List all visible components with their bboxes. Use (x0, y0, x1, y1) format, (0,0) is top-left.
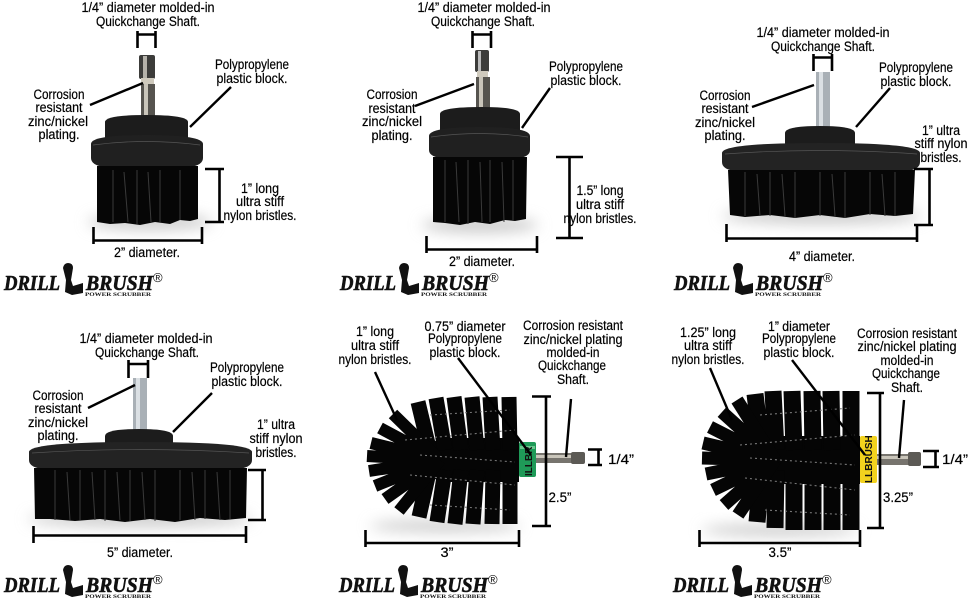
labels: 3” (440, 545, 454, 560)
pointer: polypropylene (856, 88, 890, 127)
labels: Quickchange Shaft. (431, 14, 535, 29)
labels: 1” ultra (922, 123, 960, 138)
labels: Corrosion (34, 87, 84, 102)
labels: 5” diameter. (107, 545, 173, 560)
labels: bristles. (920, 150, 962, 165)
labels: 2” diameter. (114, 245, 180, 260)
logo (3, 565, 163, 600)
labels: Polypropylene (879, 60, 953, 75)
dimension: length (700, 530, 860, 547)
dimension: bristle length (248, 470, 266, 520)
labels: plastic block. (430, 345, 500, 360)
labels: Polypropylene (549, 59, 623, 74)
labels: zinc/nickel (28, 415, 88, 430)
labels: plating. (38, 428, 78, 443)
pointer: corrosion (88, 385, 135, 408)
pointer: corrosion (90, 83, 143, 105)
labels: 1/4” diameter molded-in (80, 331, 212, 346)
labels: zinc/nickel (695, 115, 755, 130)
quickchange shaft bracket (128, 360, 148, 378)
labels: 1” ultra (257, 417, 295, 432)
labels: plastic block. (212, 374, 282, 389)
logo (672, 565, 832, 600)
logo (338, 565, 498, 600)
labels: Corrosion (366, 87, 418, 102)
labels: molded-in (880, 353, 934, 368)
labels: ultra stiff (236, 194, 284, 209)
labels (338, 318, 634, 560)
labels (362, 0, 636, 269)
logo: ® (153, 572, 163, 587)
icon: 4 inch brush photo (722, 72, 920, 218)
quickchange shaft bracket (814, 54, 832, 71)
dimension: shaft quarter inch (923, 451, 939, 467)
labels: zinc/nickel (362, 114, 422, 129)
panel: 2 inch brush (3, 0, 296, 298)
labels: zinc/nickel plating (858, 339, 956, 354)
labels: stiff nylon (914, 136, 968, 151)
pointer: bristles (375, 372, 397, 420)
logo: ® (823, 270, 833, 285)
panel: 4 inch brush (673, 25, 968, 298)
logo: BRUSH (420, 573, 489, 597)
logo: DRILL (3, 271, 60, 295)
labels: ultra stiff (351, 338, 399, 353)
icon: round green brush photo: ILLBR (524, 446, 535, 476)
labels: 1” long (241, 181, 279, 196)
icon: round yellow brush photo: LLBRUSH (864, 435, 875, 483)
labels: 2.5” (548, 490, 572, 505)
labels: 1/4” (942, 452, 968, 467)
pointer: corrosion (752, 85, 814, 107)
labels: 3.5” (768, 545, 792, 560)
dimension: height (532, 396, 551, 526)
labels (672, 319, 968, 560)
labels: plating. (38, 127, 80, 142)
pointer: corrosion (415, 84, 474, 106)
labels: 1/4” (608, 452, 634, 467)
logo: ® (153, 270, 163, 285)
labels: Corrosion resistant (857, 326, 957, 341)
logo: BRUSH (85, 271, 154, 295)
labels: plastic block. (550, 73, 622, 88)
labels: Quickchange Shaft. (95, 345, 199, 360)
labels: 1” diameter (768, 319, 830, 334)
logo: ® (488, 572, 498, 587)
pointer: block (792, 360, 865, 455)
logo (673, 263, 833, 298)
dimension: bristle length (914, 169, 933, 225)
icon: round green brush photo (367, 397, 585, 524)
labels: ultra stiff (684, 338, 732, 353)
panel: 2 inch 1.5 long brush (339, 0, 636, 298)
panel: 5 inch brush (3, 331, 302, 600)
labels (28, 331, 302, 560)
labels: 1.25” long (680, 325, 736, 340)
pointer: block (458, 358, 531, 455)
dimension: diameter (94, 227, 202, 244)
logo: BRUSH (85, 573, 154, 597)
labels: nylon bristles. (338, 352, 412, 367)
pointer: polypropylene (173, 393, 212, 432)
labels: resistant (34, 401, 82, 416)
labels: resistant (368, 101, 416, 116)
icon: round yellow brush photo (702, 391, 921, 530)
dimension: diameter (426, 236, 537, 253)
logo: DRILL (672, 573, 729, 597)
labels: resistant (36, 100, 83, 115)
dimension: diameter (34, 526, 246, 543)
pointer: polypropylene (522, 88, 550, 128)
labels: zinc/nickel (28, 114, 88, 129)
labels: plastic block. (880, 74, 952, 89)
labels: bristles. (256, 445, 296, 460)
logo: DRILL (339, 271, 396, 295)
icon: 2 inch brush photo (91, 55, 203, 225)
logo: DRILL (673, 271, 730, 295)
labels: 3.25” (883, 490, 913, 505)
pointer: bristles (710, 368, 732, 420)
logo: ® (822, 572, 832, 587)
icon: 1.5 inch bristle brush photo (429, 50, 530, 225)
logo (3, 263, 163, 298)
labels: nylon bristles. (564, 211, 636, 226)
labels: Quickchange Shaft. (771, 39, 875, 54)
labels: 1/4” diameter molded-in (756, 25, 890, 40)
dimension: length (366, 530, 519, 547)
labels: 1.5” long (576, 183, 624, 198)
panel: 1 inch block round brush (672, 319, 968, 600)
labels (695, 25, 968, 264)
labels: Shaft. (557, 372, 589, 387)
logo: DRILL (3, 573, 60, 597)
labels: Polypropylene (215, 57, 289, 72)
labels: molded-in (546, 345, 600, 360)
logo: DRILL (338, 573, 395, 597)
labels: 0.75” diameter (424, 319, 506, 334)
logo: POWER SCRUBBER (754, 594, 821, 600)
logo: BRUSH (754, 573, 823, 597)
panel: 0.75 inch block round brush (338, 318, 634, 600)
logo (339, 263, 499, 298)
labels: 2” diameter. (449, 254, 515, 269)
labels: resistant (702, 101, 749, 116)
logo: ® (489, 270, 499, 285)
dimension: height (867, 393, 884, 528)
logo: POWER SCRUBBER (85, 594, 152, 600)
pointer: shaft (899, 400, 904, 458)
labels: Corrosion (700, 88, 750, 103)
pointer: polypropylene (190, 87, 231, 127)
labels: Polypropylene (210, 360, 284, 375)
labels: ultra stiff (576, 197, 624, 212)
labels: Corrosion (32, 388, 84, 403)
icon: 5 inch brush photo (29, 378, 252, 522)
labels (28, 0, 296, 260)
labels: stiff nylon (250, 431, 302, 446)
logo: POWER SCRUBBER (420, 594, 487, 600)
labels: nylon bristles. (672, 352, 744, 367)
labels: Polypropylene (762, 331, 836, 346)
dimension: bristle length (556, 157, 583, 238)
labels: 4” diameter. (789, 249, 855, 264)
labels: 1” long (356, 324, 394, 339)
pointer: shaft (566, 399, 571, 457)
labels: Corrosion resistant (523, 318, 623, 333)
logo: POWER SCRUBBER (85, 292, 152, 298)
quickchange shaft bracket (472, 31, 491, 48)
logo: POWER SCRUBBER (421, 292, 488, 298)
labels: nylon bristles. (224, 208, 296, 223)
labels: plating. (704, 128, 746, 143)
labels: 1/4” diameter molded-in (418, 0, 550, 15)
dimension: bristle length (205, 169, 224, 222)
quickchange shaft bracket (138, 31, 156, 48)
labels: plastic block. (764, 345, 834, 360)
labels: Quickchange (872, 366, 940, 381)
logo: BRUSH (755, 271, 824, 295)
labels: plating. (372, 128, 412, 143)
labels: 1/4” diameter molded-in (82, 0, 214, 15)
labels: Polypropylene (428, 331, 502, 346)
logo: BRUSH (421, 271, 490, 295)
dimension: diameter (726, 224, 917, 242)
labels: Shaft. (891, 380, 923, 395)
dimension: shaft quarter inch (588, 450, 602, 465)
logo: POWER SCRUBBER (755, 292, 822, 298)
labels: Quickchange Shaft. (96, 14, 200, 29)
labels: plastic block. (216, 71, 288, 86)
labels: Quickchange (538, 358, 606, 373)
labels: zinc/nickel plating (524, 332, 622, 347)
